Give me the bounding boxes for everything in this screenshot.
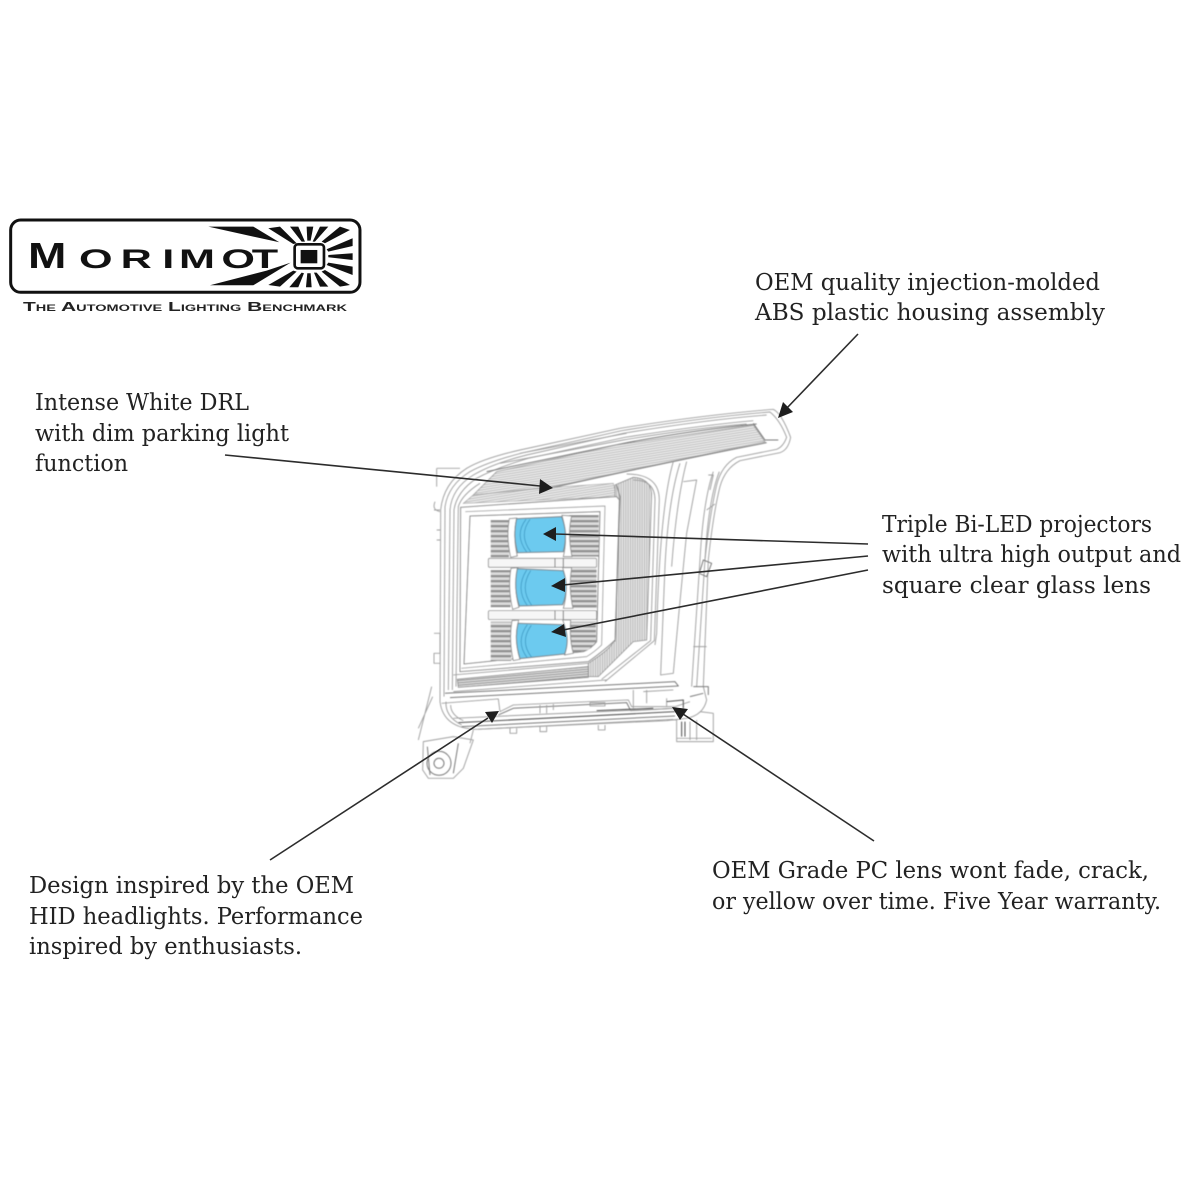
right side ribs [661,463,697,675]
text: projector callout: with ultra high output and [882,542,1181,568]
arrow: housing [778,334,858,418]
text: PC lens callout: or yellow over time. Five Year warranty. [712,889,1161,915]
projector fins [491,515,599,661]
lower bezel strip [457,667,588,687]
arrow: projector 2 [551,556,868,592]
DRL upper light strip [463,425,765,503]
text: DRL callout: Intense White DRL [35,390,249,416]
arrow: DRL [225,455,553,494]
lower housing details [442,682,708,733]
logo frame [11,220,360,292]
text: projector callout: square clear glass lens [882,573,1151,599]
text: design callout: inspired by enthusiasts. [29,934,302,960]
logo tagline: The Automotive Lighting Benchmark [23,299,348,314]
projector dividers [488,558,597,620]
text: projector callout [882,512,1181,599]
text: design callout: HID headlights. Performance [29,904,363,930]
logo: Morimoto [11,220,360,314]
arrow: design [270,711,499,860]
outer housing outline [434,409,791,729]
text: housing callout: OEM quality injection-molded [755,270,1100,296]
text: housing callout: ABS plastic housing assembly [754,300,1105,326]
text: PC lens callout [712,858,1161,915]
text: PC lens callout: OEM Grade PC lens wont fade, crack, [712,858,1149,884]
headlight line drawing [418,409,791,778]
text: DRL callout [35,390,290,477]
projector 2 lens [510,568,573,609]
text: DRL callout: with dim parking light [35,421,290,447]
right side reflector stack [588,474,659,682]
arrow: PC lens [672,707,874,841]
projector 1 lens [508,515,572,557]
text: design callout [29,873,363,960]
right bottom mounting bracket [668,712,713,742]
text: projector callout: Triple Bi-LED projectors [882,512,1152,538]
arrow: projector 1 [543,527,868,544]
arrow: projector 3 [551,570,868,637]
left bottom mounting bracket [418,687,473,778]
inner bezel frame [460,497,619,672]
text: design callout: Design inspired by the OEM [29,873,354,899]
logo sun rays [208,227,353,287]
text: housing callout [754,270,1105,326]
logo wordmark rest: ORIMOT [79,243,278,274]
bezel opening [464,512,600,664]
projector 3 lens [511,620,573,661]
text: DRL callout: function [35,451,128,477]
logo wordmark initial: M [28,236,66,276]
